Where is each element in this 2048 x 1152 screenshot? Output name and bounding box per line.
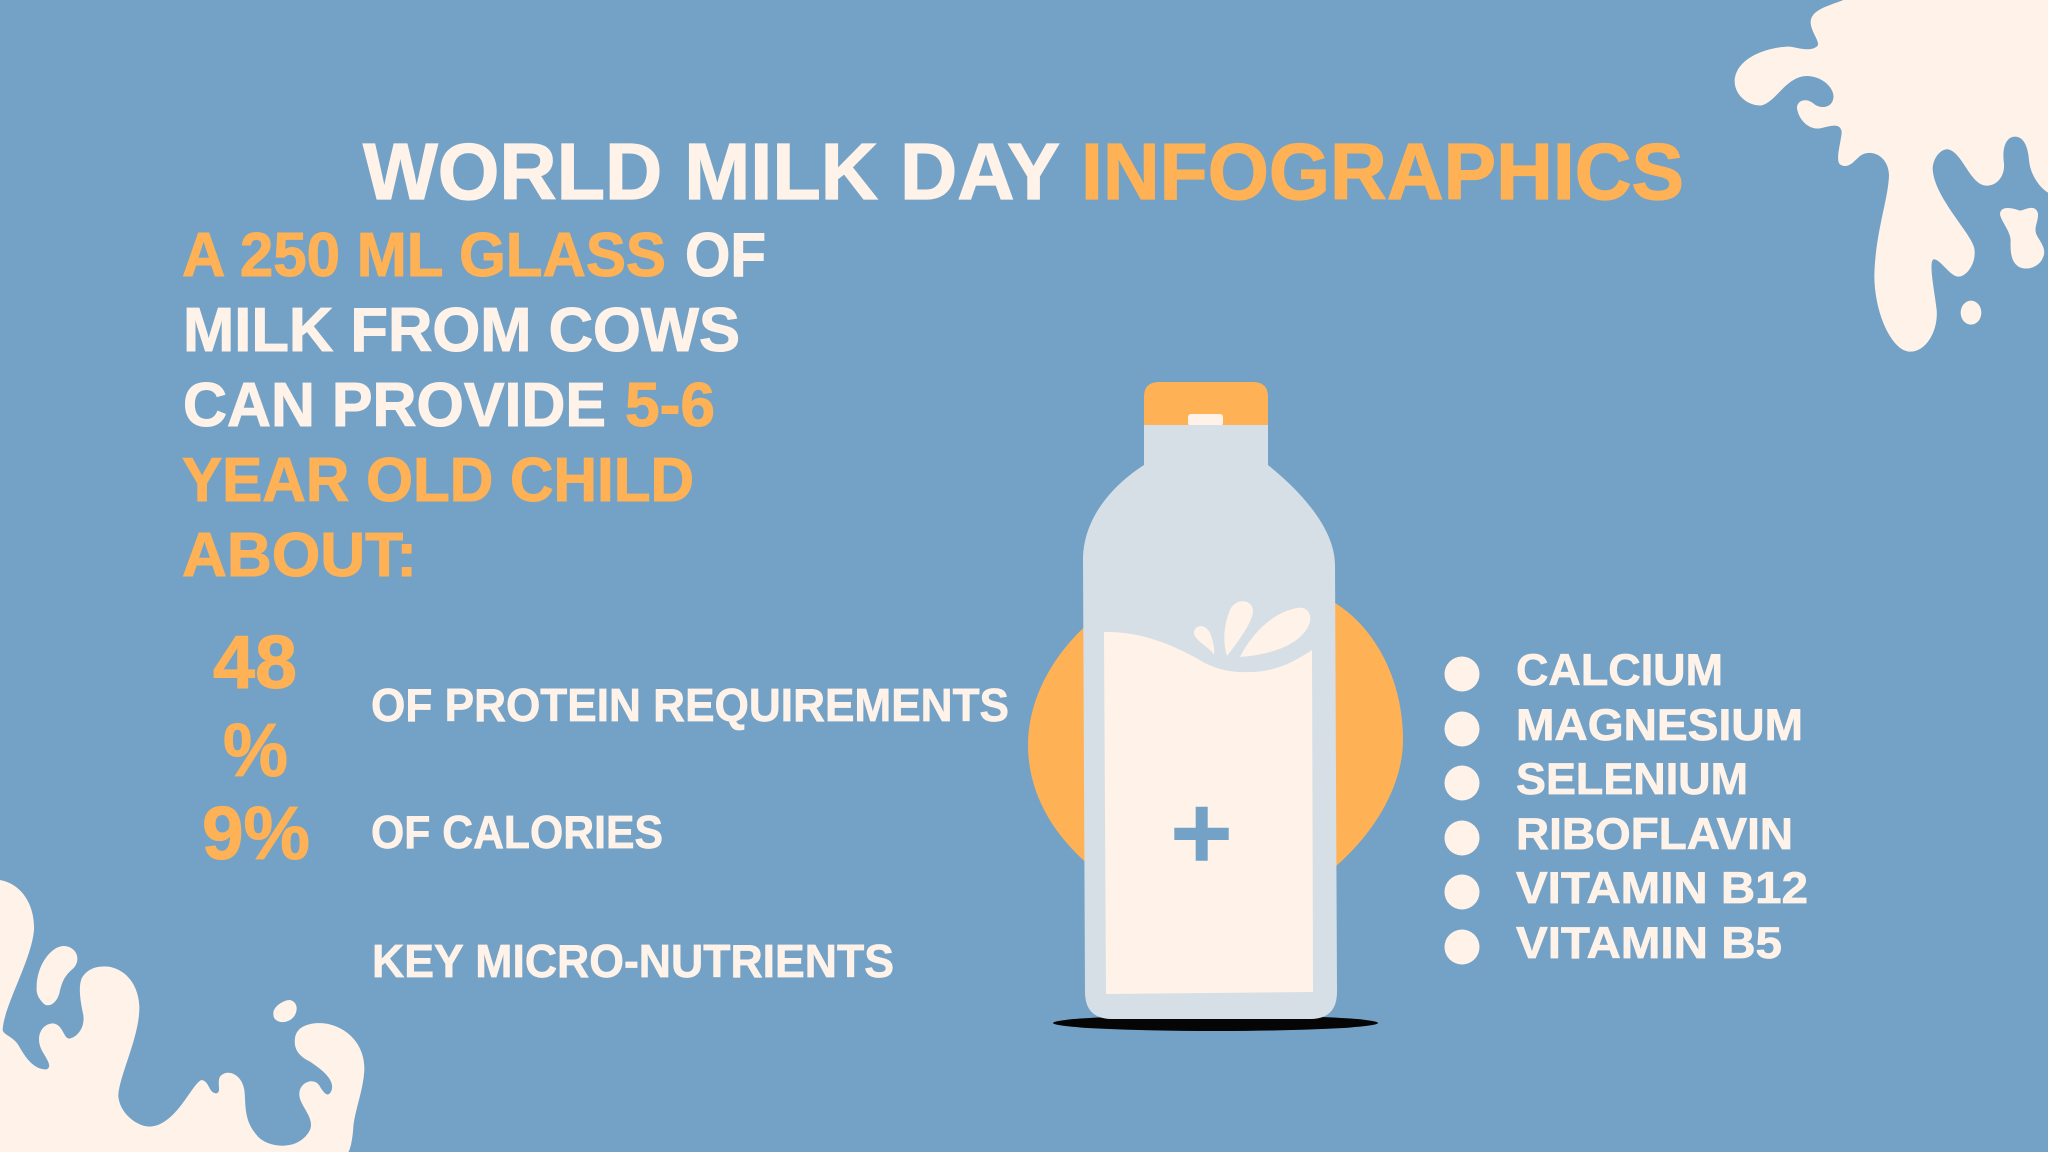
stat: 9% of calories (202, 791, 663, 875)
intro text block (182, 220, 766, 590)
title (363, 127, 1684, 216)
milk splash: bottom left (0, 880, 364, 1152)
bottle cap (1144, 382, 1268, 426)
milk splash droplets (1194, 601, 1310, 657)
intro text block: MILK FROM COWS (183, 295, 740, 365)
intro text block: ABOUT: (182, 520, 417, 590)
title: INFOGRAPHICS (1081, 127, 1684, 216)
bullet: vitamin b12: VITAMIN B12 (1516, 864, 1808, 913)
icon: plus (1174, 807, 1229, 861)
stat: 48% of protein requirements: % (223, 708, 288, 792)
stat: 48% of protein requirements (213, 620, 1009, 792)
milk level (1104, 632, 1313, 994)
intro text block: A 250 ML GLASS (182, 220, 666, 290)
intro text block: CAN PROVIDE (183, 370, 606, 440)
cap tab (1188, 414, 1223, 426)
stat: 48% of protein requirements: 48 (213, 620, 297, 704)
bottle body (1083, 425, 1337, 1019)
title: WORLD MILK DAY (363, 127, 1060, 216)
stat: 9% of calories: OF CALORIES (371, 806, 663, 858)
intro text block: YEAR OLD CHILD (182, 445, 694, 515)
stat: key micro-nutrients: KEY MICRO-NUTRIENTS (372, 935, 894, 987)
bottle illustration (1028, 382, 1403, 1031)
orange circle behind bottle (1028, 600, 1403, 866)
bullet: calcium: CALCIUM (1516, 646, 1723, 695)
intro text block: 5-6 (625, 370, 715, 440)
stat: 48% of protein requirements: OF PROTEIN REQUIREMENTS (371, 679, 1009, 731)
bullet: vitamin b5: VITAMIN B5 (1516, 919, 1782, 968)
bullet: riboflavin: RIBOFLAVIN (1516, 810, 1793, 859)
bullet: selenium: SELENIUM (1516, 755, 1748, 804)
bottle shadow (1053, 1015, 1378, 1031)
nutrient list (1444, 646, 1808, 968)
stat: 9% of calories: 9% (202, 791, 310, 875)
intro text block: OF (685, 220, 766, 290)
milk splash: top right (1735, 0, 2048, 352)
bullet: magnesium: MAGNESIUM (1516, 701, 1803, 750)
